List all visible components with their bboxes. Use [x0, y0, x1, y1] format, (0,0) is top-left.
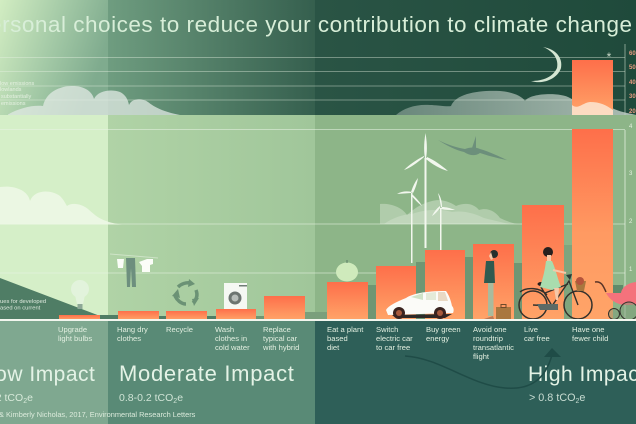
range: moderate impact: 2: [173, 398, 177, 405]
low impact labels: light bulbs: [58, 334, 92, 343]
axis: lower: 1: [629, 267, 633, 273]
note: developed countries text: ues for developed: [0, 299, 46, 305]
moderate labels: Wash: [215, 325, 234, 334]
wind turbines: [397, 133, 455, 263]
high labels: to car free: [376, 343, 410, 352]
icon: clothes line: [110, 254, 158, 287]
range: high impact: 2: [576, 398, 580, 405]
high labels: Avoid one: [473, 325, 507, 334]
icon: recycle: [172, 279, 199, 306]
high labels: diet: [327, 343, 340, 352]
high labels: flight: [473, 352, 490, 361]
icon: apple: [336, 260, 358, 282]
source citation: & Kimberly Nicholas, 2017, Environmental Research Letters: [0, 410, 196, 419]
heading: moderate impact: Moderate Impact: [119, 361, 295, 386]
low impact labels: Upgrade: [58, 325, 87, 334]
high labels: fewer child: [572, 334, 608, 343]
panel: high impact column: [315, 0, 636, 424]
axis: lower: [625, 124, 633, 320]
bar chart: [59, 129, 613, 320]
moderate labels: [117, 325, 299, 352]
bar: one fewer child, upper segment: [572, 60, 613, 115]
axis: lower: 3: [629, 171, 633, 177]
high labels: Live: [524, 325, 538, 334]
note: emissions text: emissions: [1, 101, 26, 107]
axis: upper: 50: [629, 65, 636, 71]
range: high impact: > 0.8 tCO: [529, 392, 576, 404]
high labels: electric car: [376, 334, 413, 343]
moderate labels: Hang dry: [117, 325, 148, 334]
note: emissions text: substantially: [1, 94, 32, 100]
range: low impact: e: [27, 392, 33, 404]
clouds: right: [396, 91, 636, 115]
moderate labels: Recycle: [166, 325, 193, 334]
note: emissions text: [0, 81, 34, 107]
grid lines: [0, 58, 625, 273]
moderate labels: Replace: [263, 325, 291, 334]
icon: man with suitcase: [484, 250, 511, 319]
moderate labels: typical car: [263, 334, 298, 343]
high labels: energy: [426, 334, 449, 343]
range: moderate impact: e: [177, 392, 183, 404]
moderate labels: clothes in: [215, 334, 247, 343]
icon: crescent moon: [531, 47, 561, 82]
cloud: low impact white: [0, 187, 122, 224]
panel: low impact column: [0, 0, 108, 424]
high labels: roundtrip: [473, 334, 503, 343]
note: emissions text: low emissions: [0, 81, 34, 87]
icon: car: [386, 291, 454, 319]
icon: baby carriage: [595, 282, 636, 320]
axis: upper: 30: [629, 94, 636, 100]
high labels: Buy green: [426, 325, 461, 334]
moderate labels: clothes: [117, 334, 141, 343]
icon: washing machine: [224, 283, 247, 309]
asterisk: *: [607, 50, 612, 64]
note: developed countries text: ased on current: [0, 306, 41, 312]
clouds: left: [8, 86, 180, 115]
wind clouds: [380, 200, 520, 224]
axis: upper: [625, 44, 636, 115]
icon: light bulb: [71, 280, 89, 309]
panel: moderate impact column: [108, 0, 315, 424]
icon: airplane: [438, 136, 507, 160]
high labels: Switch: [376, 325, 398, 334]
axis: upper: 20: [629, 109, 636, 115]
high labels: based: [327, 334, 348, 343]
moderate labels: cold water: [215, 343, 250, 352]
axis: upper: 40: [629, 80, 636, 86]
axis: lower: 2: [629, 219, 633, 225]
high labels: Eat a plant: [327, 325, 364, 334]
axis: upper: 60: [629, 51, 636, 57]
high labels: [327, 325, 608, 361]
moderate labels: with hybrid: [262, 343, 299, 352]
range: low impact: 2: [23, 398, 27, 405]
baseline: [0, 319, 636, 321]
high labels: Have one: [572, 325, 605, 334]
arrow: [405, 348, 561, 388]
icon: woman on bicycle: [519, 247, 592, 319]
note: developed countries text: [0, 299, 46, 312]
axis: lower: 4: [629, 124, 633, 130]
high labels: car free: [524, 334, 550, 343]
low impact labels: [58, 325, 92, 343]
range: high impact: e: [579, 392, 585, 404]
high labels: transatlantic: [473, 343, 514, 352]
backdrop steps: [100, 245, 623, 319]
cloud over bar: [572, 102, 613, 115]
note: emissions text: lowlands: [0, 87, 22, 93]
range: moderate impact: 0.8-0.2 tCO: [119, 392, 173, 404]
